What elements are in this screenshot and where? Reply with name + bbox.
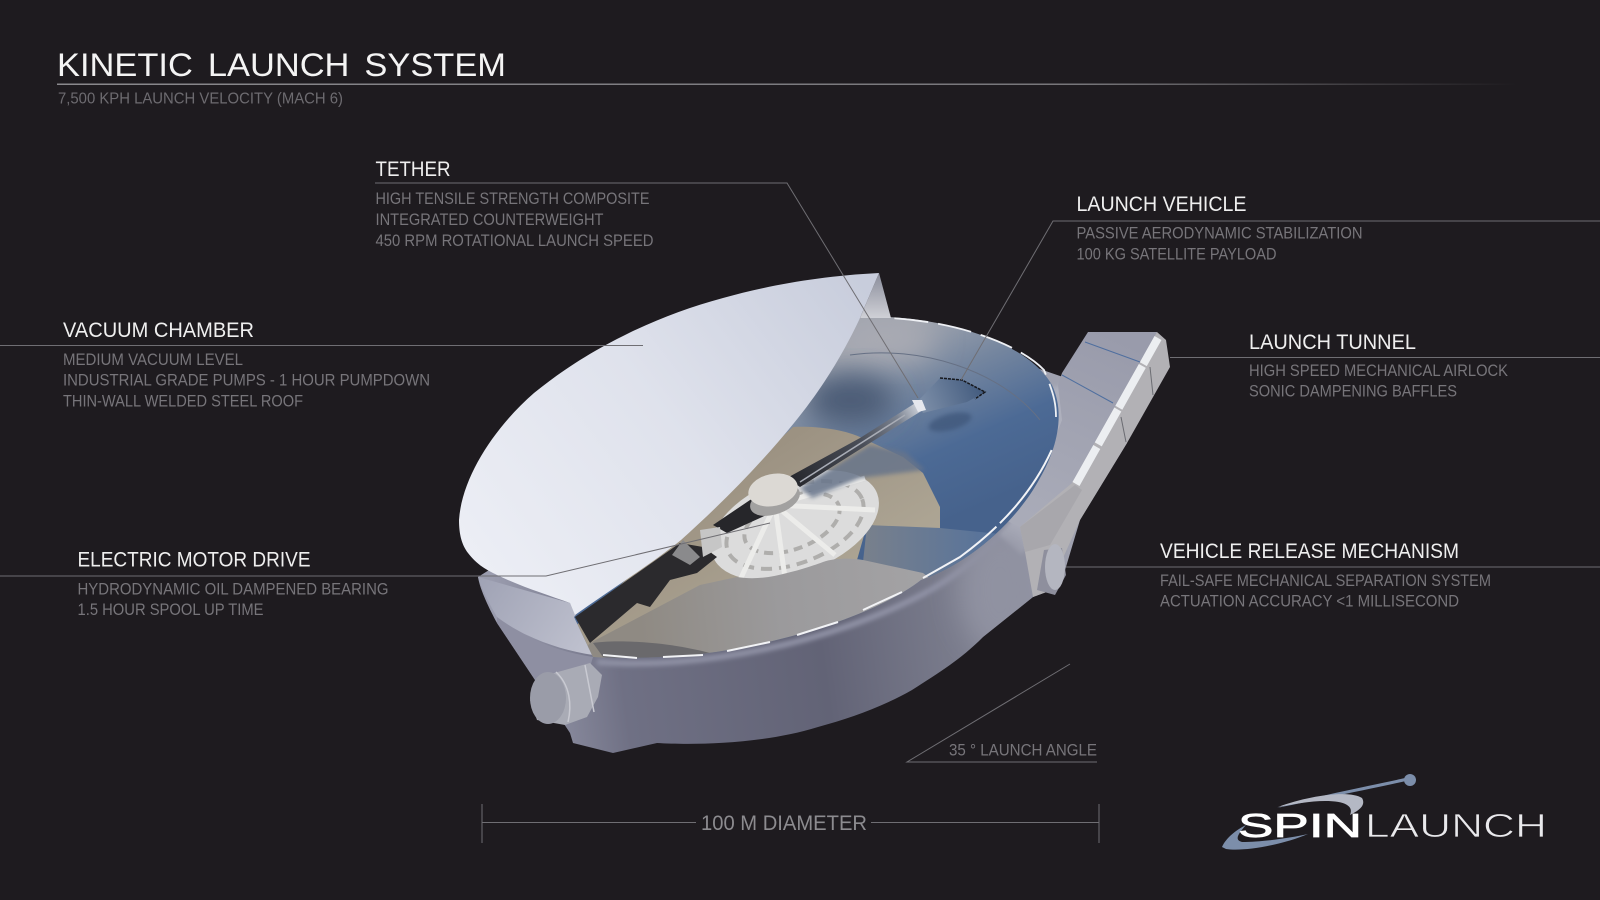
tunnel	[1005, 332, 1170, 597]
callout: vacuum chamber: THIN-WALL WELDED STEEL ROOF	[63, 392, 303, 410]
release mount	[1020, 485, 1082, 552]
callout: vacuum chamber: MEDIUM VACUUM LEVEL	[63, 350, 243, 369]
callout: electric motor drive: 1.5 HOUR SPOOL UP TIME	[78, 600, 264, 619]
rim dashes	[603, 318, 1056, 658]
tunnel side face	[1020, 332, 1170, 597]
callout: launch tunnel	[1170, 331, 1600, 400]
callout: electric motor drive: HYDRODYNAMIC OIL DAMPENED BEARING	[78, 580, 388, 598]
rim shadow ellipse	[593, 641, 710, 658]
launch vehicle	[912, 378, 985, 413]
callout: vacuum chamber: INDUSTRIAL GRADE PUMPS - 1 HOUR PUMPDOWN	[63, 370, 430, 390]
web disc	[712, 470, 879, 578]
shell shading	[597, 385, 1066, 663]
logo ball	[1404, 774, 1416, 786]
logo orbit swoosh	[1222, 825, 1308, 850]
counterweight arm	[672, 498, 773, 565]
grey wall wedge	[863, 525, 996, 577]
front floor	[588, 558, 928, 658]
callout: tether: INTEGRATED COUNTERWEIGHT	[376, 210, 604, 229]
title: KINETIC LAUNCH SYSTEM	[57, 47, 506, 83]
outer shell	[478, 318, 1127, 753]
callout: launch vehicle: PASSIVE AERODYNAMIC STABILIZATION	[1076, 224, 1362, 242]
launch angle annotation	[907, 664, 1097, 762]
callout: tether	[375, 158, 918, 398]
diameter dimension	[482, 804, 1099, 843]
callout: vacuum chamber	[0, 319, 643, 410]
illustration: launch chamber	[459, 273, 1170, 753]
wall contour	[850, 353, 1040, 420]
upper floor	[560, 427, 940, 660]
title block	[57, 47, 1517, 108]
hub	[748, 474, 800, 516]
diameter dimension: 100 M DIAMETER	[701, 812, 867, 835]
callout: vehicle release mechanism: FAIL-SAFE MECHANICAL SEPARATION SYSTEM	[1160, 571, 1491, 590]
callout: launch tunnel: LAUNCH TUNNEL	[1249, 331, 1416, 354]
wall dark band	[805, 374, 895, 426]
left motor housing	[530, 663, 602, 725]
left side wall	[478, 577, 593, 720]
callout: vehicle release mechanism: VEHICLE RELEASE MECHANISM	[1160, 540, 1459, 563]
callout: vehicle release mechanism: ACTUATION ACCURACY <1 MILLISECOND	[1160, 592, 1459, 610]
callout: tether: TETHER	[376, 158, 450, 181]
callout: launch vehicle: 100 KG SATELLITE PAYLOAD	[1076, 244, 1276, 264]
subtitle: 7,500 KPH LAUNCH VELOCITY (MACH 6)	[58, 90, 343, 108]
tether arm	[787, 402, 923, 487]
callout: tether: HIGH TENSILE STRENGTH COMPOSITE	[376, 189, 650, 208]
logo: SpinLaunch	[1222, 774, 1547, 850]
callout: electric motor drive	[0, 523, 770, 619]
tunnel bright strip	[1076, 338, 1158, 484]
logo: SpinLaunch: LAUNCH	[1365, 807, 1547, 844]
callout: tether: 450 RPM ROTATIONAL LAUNCH SPEED	[376, 231, 654, 250]
callout: launch vehicle: LAUNCH VEHICLE	[1076, 193, 1246, 216]
callout: launch vehicle	[961, 193, 1600, 380]
callout: launch tunnel: SONIC DAMPENING BAFFLES	[1249, 382, 1457, 400]
callout: electric motor drive: ELECTRIC MOTOR DRIVE	[78, 548, 310, 572]
callout: vacuum chamber: VACUUM CHAMBER	[63, 319, 254, 342]
right release mechanism	[1037, 544, 1066, 595]
lid side thickness	[860, 273, 891, 318]
wall highlight	[835, 318, 935, 362]
arm shadow	[800, 445, 925, 498]
floor shadow	[575, 543, 717, 643]
callout: launch tunnel: HIGH SPEED MECHANICAL AIRLOCK	[1249, 361, 1509, 380]
tunnel top	[1005, 332, 1157, 527]
callout: vehicle release mechanism	[1066, 540, 1600, 610]
back wall	[574, 317, 1059, 657]
launch angle annotation: 35 ° LAUNCH ANGLE	[949, 742, 1097, 760]
vacuum chamber lid	[459, 273, 879, 615]
logo wordmark: SPIN	[1238, 807, 1362, 844]
tunnel baffles	[1062, 342, 1140, 403]
interior	[574, 317, 1059, 658]
